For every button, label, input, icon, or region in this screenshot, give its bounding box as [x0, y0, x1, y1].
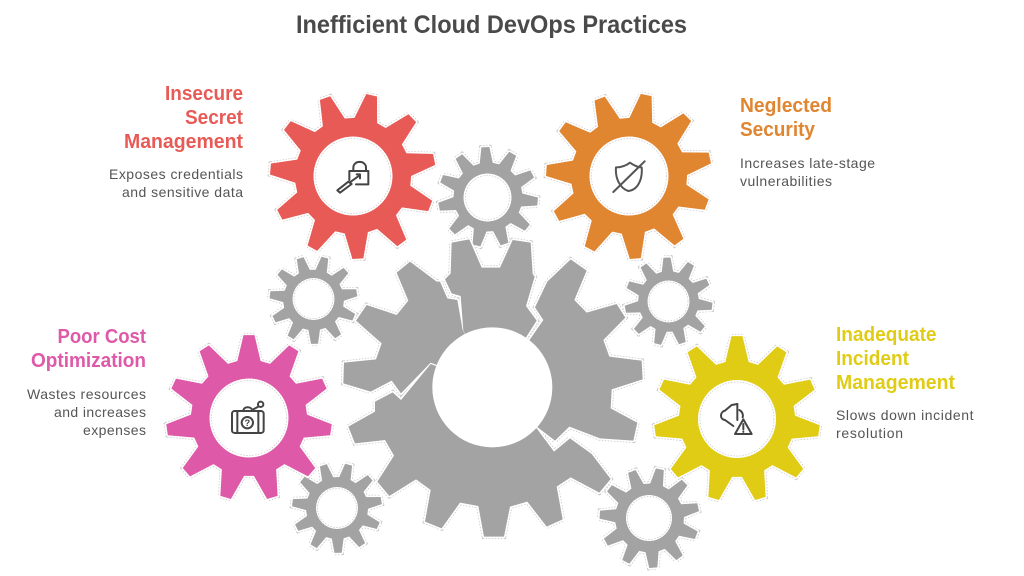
icon: megaphone with warning triangle — [721, 404, 752, 434]
text block: Neglected Security: vulnerabilities — [740, 173, 832, 189]
text block: Neglected Security: Increases late-stage — [740, 155, 875, 171]
gear hub — [432, 327, 552, 447]
gear piece: right — [492, 259, 643, 441]
text block: Poor Cost Optimization: Wastes resources — [27, 386, 146, 402]
icon: camera case with question mark — [232, 402, 264, 433]
text block: Inadequate Incident Management — [836, 324, 974, 441]
text block: Insecure Secret Management: Insecure — [165, 83, 243, 105]
text block: Inadequate Incident Management: Slows down incident — [836, 407, 974, 423]
text block: Inadequate Incident Management: resolution — [836, 425, 903, 441]
small gray gear: lower left — [282, 453, 392, 562]
gear piece: bottom — [348, 364, 611, 537]
text block: Insecure Secret Management — [109, 83, 243, 200]
small gray gear: upper right — [623, 256, 714, 346]
text block: Poor Cost Optimization: and increases — [54, 404, 146, 420]
text block: Insecure Secret Management: Secret — [185, 107, 243, 129]
text block: Neglected Security: Neglected — [740, 95, 832, 117]
text block: Insecure Secret Management: Exposes credentials — [109, 166, 243, 182]
icon: crossed-out shield — [613, 161, 645, 192]
text block: Inadequate Incident Management: Inadequate — [836, 324, 936, 346]
text block: Neglected Security: Security — [740, 119, 816, 141]
text block: Poor Cost Optimization — [27, 326, 146, 438]
text block: Poor Cost Optimization: Poor Cost — [58, 326, 146, 348]
red gear — [254, 77, 452, 274]
text block: Poor Cost Optimization: Optimization — [31, 350, 146, 372]
text block: Inadequate Incident Management: Management — [836, 372, 955, 394]
text block: Neglected Security — [740, 95, 875, 189]
title: Inefficient Cloud DevOps Practices — [296, 11, 687, 39]
yellow gear — [654, 336, 820, 500]
large central gray gear, broken into four pieces — [343, 239, 643, 537]
text block: Insecure Secret Management: Management — [124, 131, 243, 153]
pink gear — [166, 335, 332, 499]
small gray gear: top centre — [436, 145, 540, 248]
gear piece: top — [445, 239, 537, 387]
small gray gear: lower right — [591, 459, 709, 576]
icon: unlocked padlock and screwdriver — [337, 162, 368, 193]
icon: camera case with question mark: ? — [244, 418, 250, 428]
gear piece: left — [343, 262, 492, 393]
small gray gear: upper left — [260, 246, 367, 353]
orange gear — [531, 78, 727, 272]
text block: Inadequate Incident Management: Incident — [836, 348, 909, 370]
text block: Poor Cost Optimization: expenses — [83, 422, 146, 438]
text block: Insecure Secret Management: and sensitive data — [122, 184, 243, 200]
